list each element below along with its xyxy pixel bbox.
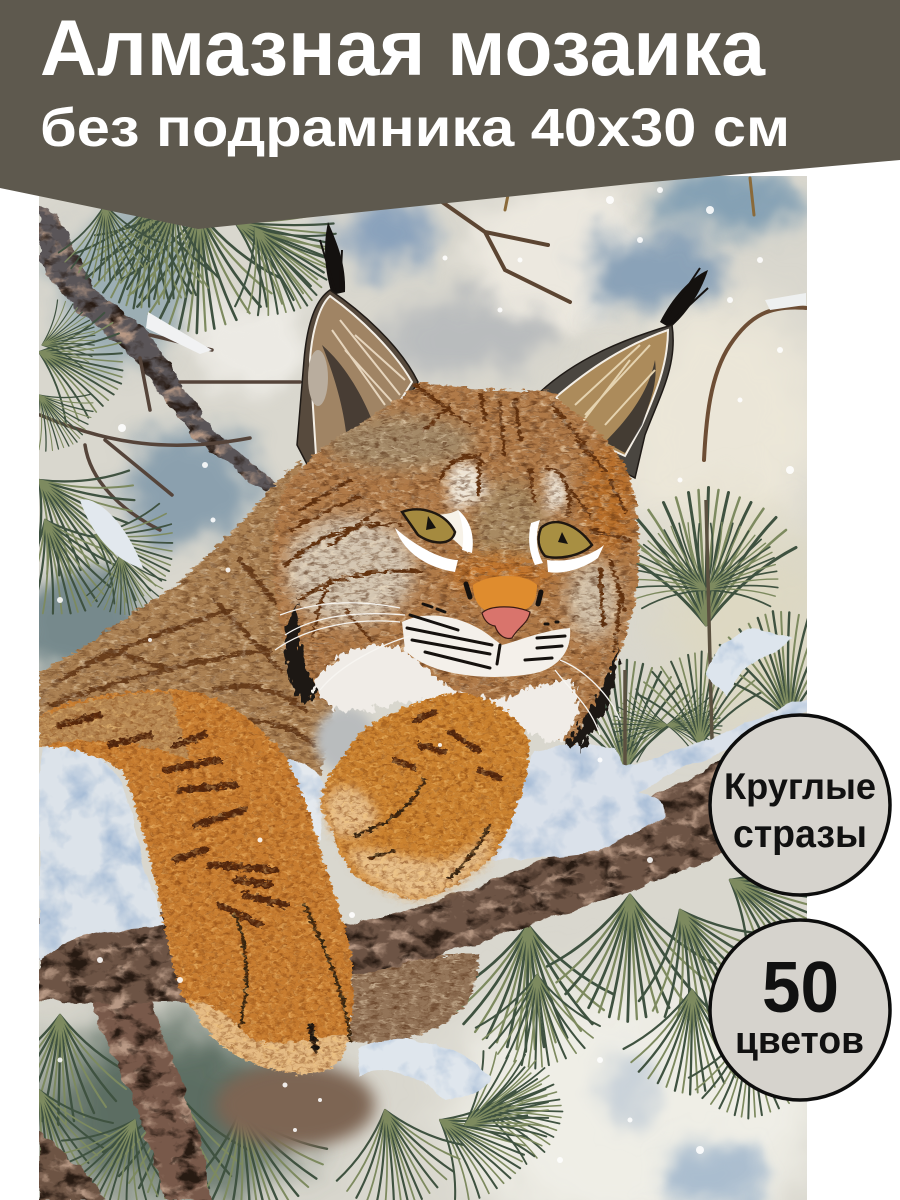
left eye [393,509,473,572]
right eye [529,520,604,573]
subtitle: без подрамника 40х30 см [40,98,790,158]
header banner [0,0,900,229]
furred face with stripes and cheeks [273,382,639,745]
pine sprays on the right [587,486,807,766]
ear tufts [320,222,708,328]
main tree branch [39,755,735,1200]
pine branch and needles upper left [0,156,360,637]
title: Алмазная мозаика [40,3,766,92]
painting: snowy lynx on a pine branch [39,176,807,1200]
nose bridge [473,576,537,612]
lynx head [273,222,708,748]
winter sky background [15,170,830,1200]
whiskers [275,603,620,735]
badge: 50 colours: 50 [762,948,839,1028]
right forepaw [321,693,529,900]
badge: round rhinestones [710,715,890,895]
pink nose [482,607,530,638]
white chin and chest fur [313,645,578,745]
body below the branch [350,955,478,1045]
badge: 50 colours [710,920,890,1100]
nostril marks [466,584,541,604]
shadowed rear body [215,1063,375,1147]
black ruff streaks [285,600,619,748]
large left foreleg [39,690,353,1074]
badge: 50 colours: цветов [735,1020,864,1062]
left ear [297,290,418,470]
white muzzle with black stripes [402,604,570,677]
grey fur under the chin [315,708,375,772]
bare twigs [435,178,806,460]
falling snowflakes [57,187,794,1163]
lynx body behind the head [39,460,335,775]
right ear [540,325,673,478]
snow on branch [39,698,807,1100]
lower pine sprays [0,816,862,1200]
badge: round rhinestones: Круглые [724,766,876,807]
badge: round rhinestones: стразы [733,813,867,856]
